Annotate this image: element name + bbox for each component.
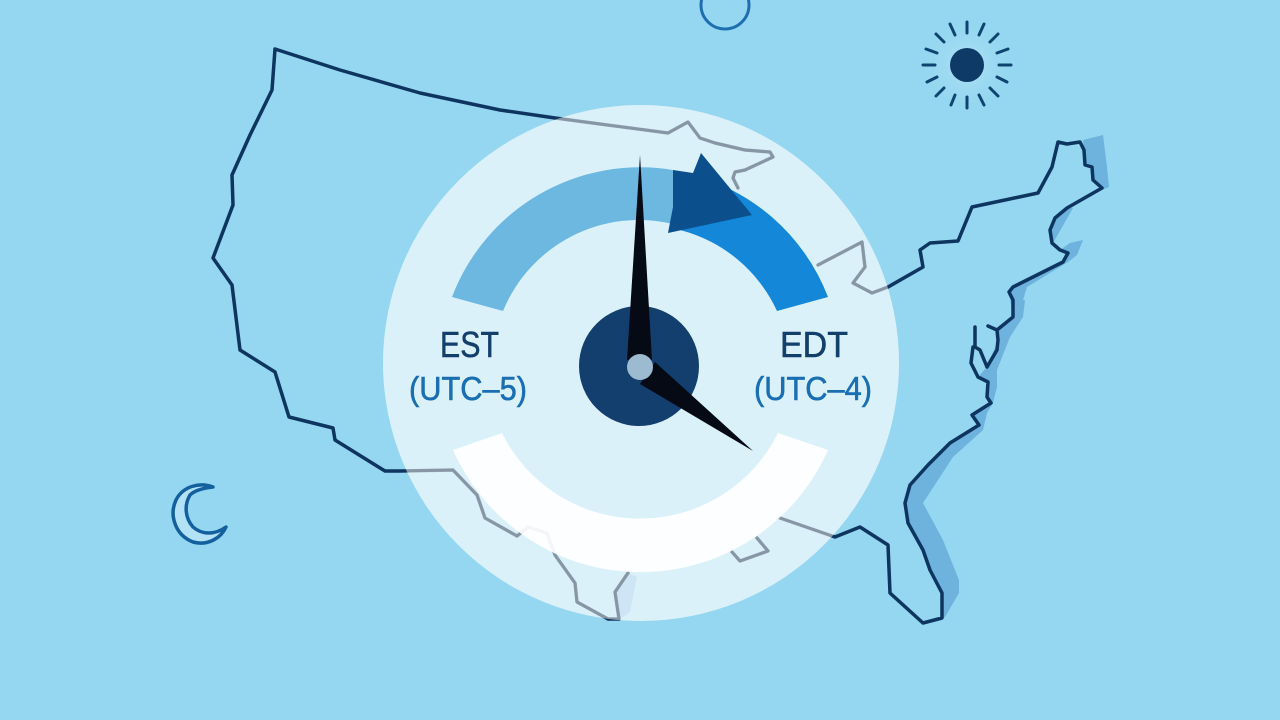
- panel: translucent clock dial: [383, 105, 899, 621]
- arrow: EST to EDT: [668, 153, 752, 233]
- clock hub: [579, 306, 699, 426]
- icon: crescent moon: [173, 485, 226, 543]
- label: UTC-5: (UTC–5): [409, 370, 527, 407]
- icon: sun: [921, 19, 1013, 111]
- icon: small ring at top: [701, 0, 749, 29]
- gauge arc: EDT segment: [680, 173, 828, 311]
- gauge arc: EST segment: [452, 167, 673, 311]
- clock centre cap: [627, 354, 653, 380]
- map shadow: east coast: [615, 135, 1109, 619]
- map outline seen through dial: [406, 118, 888, 620]
- clock minute hand: [627, 155, 652, 360]
- clock hour hand: [640, 362, 753, 451]
- label: UTC-4: (UTC–4): [754, 370, 872, 407]
- gauge arc: white lower segment: [453, 433, 828, 572]
- label: EDT: EDT: [780, 324, 848, 365]
- label: EST: EST: [440, 324, 499, 365]
- map outline: United States: [213, 49, 1102, 623]
